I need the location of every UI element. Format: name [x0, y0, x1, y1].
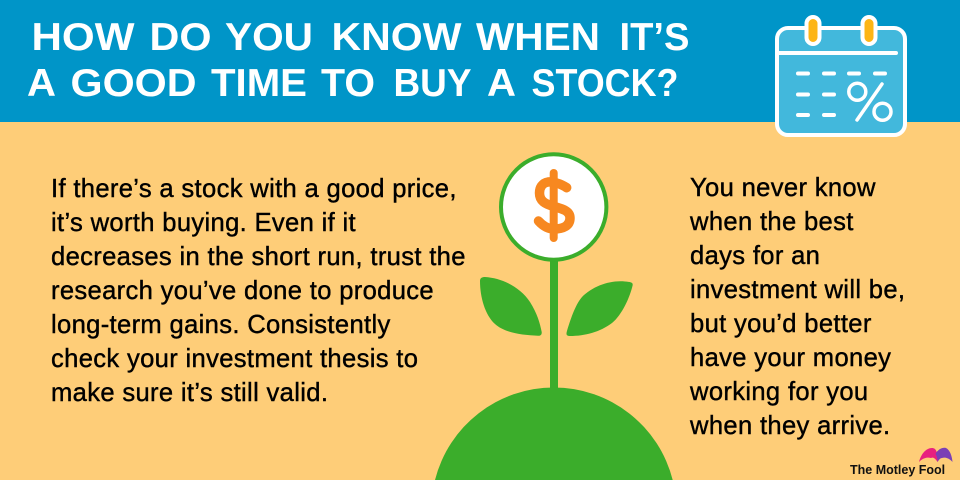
left text block: If there’s a stock with a good price, — [51, 175, 457, 203]
title: YOU — [225, 16, 313, 59]
flower circle — [501, 154, 606, 260]
title: KNOW — [332, 16, 462, 59]
right text block: days for an — [690, 242, 820, 270]
left text block: research you’ve done to produce — [51, 277, 434, 305]
title: TIME — [211, 62, 307, 105]
right text block: have your money — [690, 344, 891, 372]
icon: calendar with percent — [775, 15, 907, 137]
left text block: it’s worth buying. Even if it — [51, 209, 356, 237]
hill — [435, 387, 673, 480]
title: WHEN — [476, 16, 600, 59]
left text block: check your investment thesis to — [51, 345, 418, 373]
left text block: decreases in the short run, trust the — [51, 243, 466, 271]
right text block: when the best — [690, 208, 854, 236]
right text block: investment will be, — [690, 276, 905, 304]
right text block — [690, 174, 905, 440]
right text block: but you’d better — [690, 310, 872, 338]
logo jester hat — [919, 448, 952, 462]
left text block: make sure it’s still valid. — [51, 379, 328, 407]
illustration: plant with dollar flower — [435, 152, 673, 480]
title: HOW — [32, 16, 135, 59]
right text block: when they arrive. — [690, 412, 890, 440]
title: TO — [321, 62, 375, 105]
title: A — [487, 62, 516, 105]
title: A — [27, 62, 56, 105]
title: DO — [150, 16, 212, 59]
icon: dollar sign — [538, 173, 570, 238]
left leaf — [480, 277, 542, 336]
title: STOCK? — [532, 62, 678, 105]
left text block: long-term gains. Consistently — [51, 311, 391, 339]
title: BUY — [394, 62, 472, 105]
header band — [0, 0, 960, 122]
left text block — [51, 175, 466, 407]
right text block: You never know — [690, 174, 876, 202]
logo wordmark: The Motley Fool — [850, 463, 945, 477]
title: GOOD — [70, 62, 196, 105]
title — [27, 16, 690, 105]
title: IT’S — [620, 16, 690, 59]
right text block: working for you — [690, 378, 868, 406]
stem — [550, 250, 558, 390]
logo: The Motley Fool — [850, 448, 952, 477]
right leaf — [566, 281, 633, 336]
